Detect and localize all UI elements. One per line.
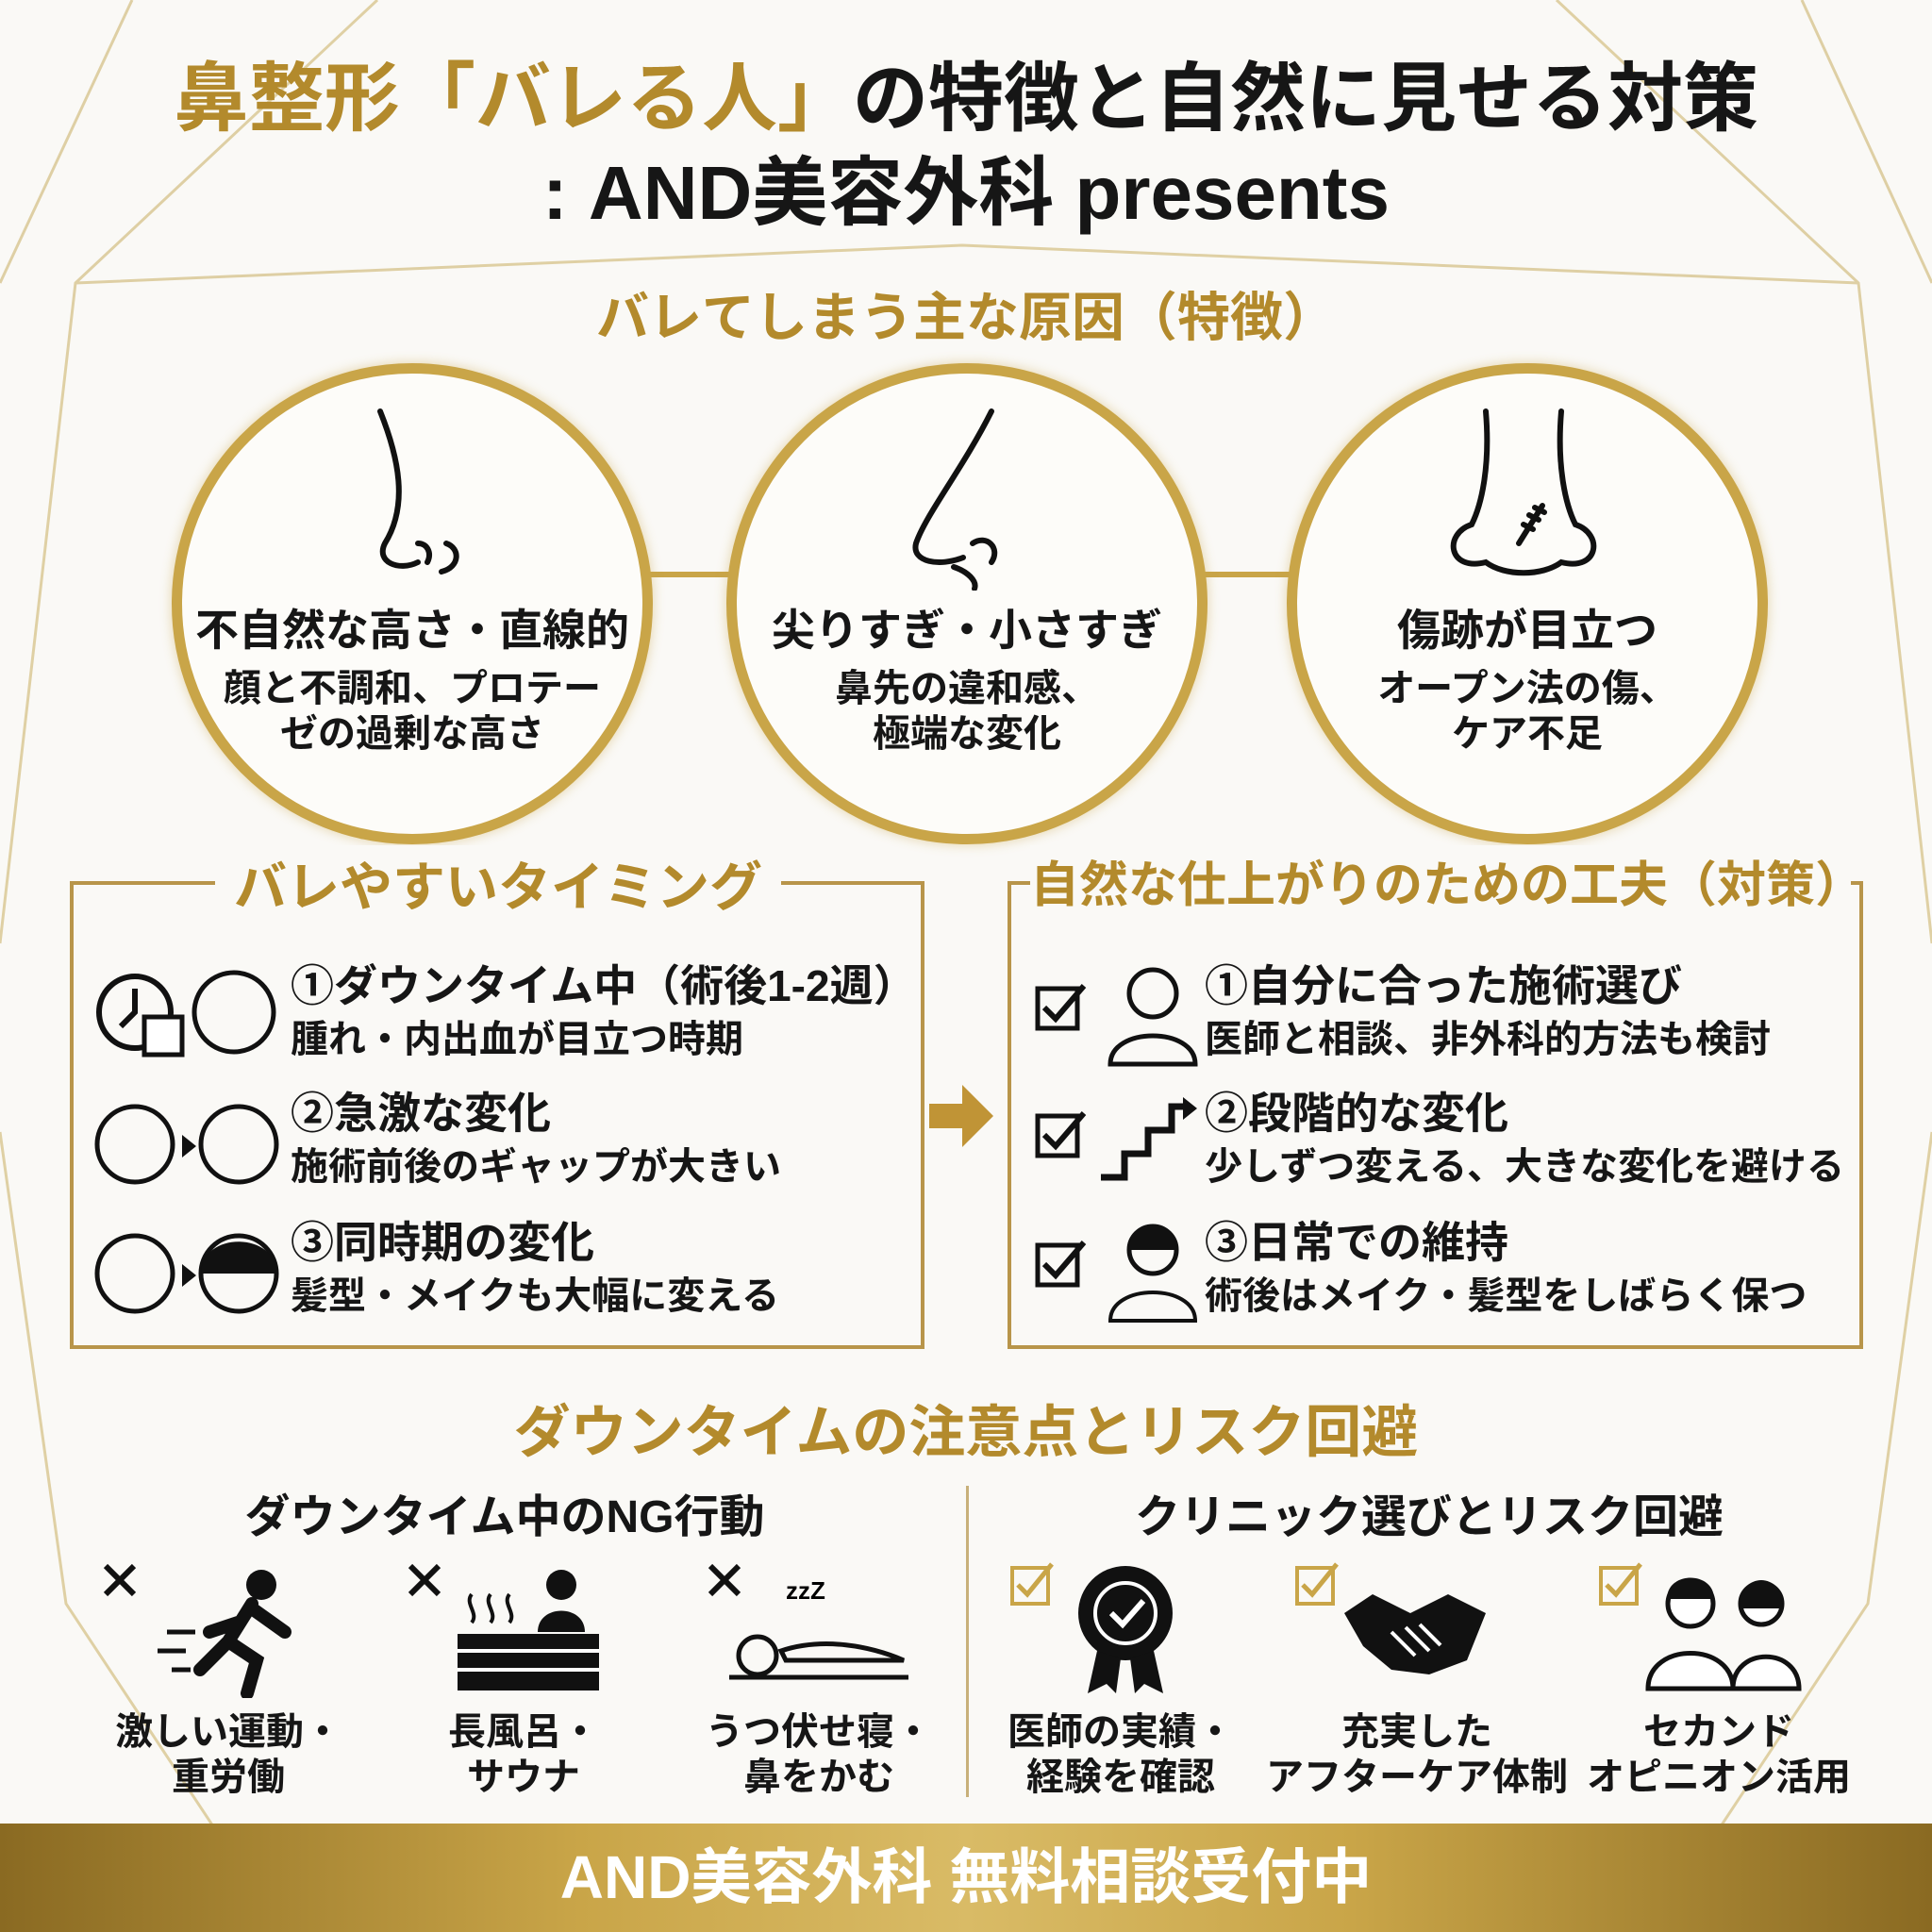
item 3: ③同時期の変化 (291, 1218, 594, 1267)
item 2: 少しずつ変える、大きな変化を避ける (1205, 1146, 1844, 1188)
heading: downtime: ダウンタイムの注意点とリスク回避 (514, 1401, 1418, 1464)
clinic: aftercare (1266, 1562, 1568, 1798)
icon: hairstyle change (94, 1234, 279, 1313)
clinic: experience (1008, 1562, 1234, 1798)
icon: check woman (1036, 1224, 1197, 1323)
icon: nose profile (377, 408, 459, 575)
item 3: 術後はメイク・髪型をしばらく保つ (1205, 1275, 1807, 1317)
subheading: clinic: クリニック選びとリスク回避 (1135, 1492, 1724, 1542)
title (174, 57, 1758, 235)
heading: timing: バレやすいタイミング (234, 858, 762, 917)
clinic: aftercare: アフターケア体制 (1266, 1757, 1568, 1798)
NG: sleep (706, 1564, 932, 1798)
clinic: second opinion (1587, 1562, 1851, 1798)
NG: sleep: うつ伏せ寝・ (706, 1711, 932, 1753)
item 1 (1036, 961, 1771, 1066)
NG: exercise: 激しい運動・ (115, 1711, 341, 1753)
NG: bath: 長風呂・ (448, 1711, 599, 1753)
panel: cause 2: 極端な変化 (873, 713, 1061, 755)
NG: exercise: 重労働 (172, 1757, 285, 1798)
item 1: 医師と相談、非外科的方法も検討 (1205, 1019, 1771, 1060)
panel: cause 1: 不自然な高さ・直線的 (195, 606, 629, 655)
panel: cause 3 (1287, 363, 1768, 844)
item 3 (94, 1218, 779, 1317)
footer banner (0, 1824, 1932, 1932)
item 2 (1036, 1089, 1844, 1188)
panel: cause 1 (172, 363, 653, 844)
clinic: second opinion: オピニオン活用 (1587, 1757, 1851, 1798)
NG: bath: サウナ (467, 1757, 580, 1798)
clinic: second opinion: セカンド (1643, 1711, 1794, 1753)
item 2: 施術前後のギャップが大きい (291, 1146, 781, 1188)
panel: measures (1008, 881, 1863, 1349)
title: 鼻整形「バレる人」の特徴と自然に見せる対策 (174, 57, 1758, 141)
icon: check steps (1036, 1097, 1197, 1181)
icon: clock and face (96, 970, 275, 1057)
icon: nose front with scar (1451, 408, 1596, 575)
item 2 (94, 1089, 781, 1188)
panel: cause 2 (726, 363, 1208, 844)
panel: cause 3: 傷跡が目立つ (1397, 606, 1657, 655)
item 1: ①ダウンタイム中（術後1-2週） (291, 961, 917, 1010)
NG: bath (408, 1564, 599, 1798)
connector lines (623, 572, 1321, 577)
item 1: ①自分に合った施術選び (1205, 961, 1682, 1010)
footer banner: AND美容外科 無料相談受付中 (560, 1843, 1372, 1911)
panel: cause 1: 顔と不調和、プロテー (224, 668, 601, 709)
NG: sleep: 鼻をかむ (743, 1757, 894, 1798)
panel: cause 3: オープン法の傷、 (1377, 668, 1677, 709)
panel: cause 1: ゼの過剰な高さ (280, 713, 544, 755)
NG: exercise (104, 1564, 341, 1798)
item 3: ③日常での維持 (1205, 1218, 1508, 1267)
item 2: ②段階的な変化 (1205, 1089, 1508, 1138)
panel: timing (70, 881, 924, 1349)
item 2: ②急激な変化 (291, 1089, 551, 1138)
item 3: 髪型・メイクも大幅に変える (291, 1275, 779, 1317)
item 3 (1036, 1218, 1807, 1323)
item 1: 腫れ・内出血が目立つ時期 (291, 1019, 743, 1060)
icon: pointed nose (912, 408, 998, 591)
clinic: experience: 経験を確認 (1026, 1757, 1215, 1798)
panel: cause 3: ケア不足 (1452, 713, 1603, 755)
clinic: experience: 医師の実績・ (1008, 1711, 1234, 1753)
title: : AND美容外科 presents (542, 151, 1390, 235)
heading: measures: 自然な仕上がりのための工夫（対策） (1030, 858, 1864, 913)
panel: cause 2: 鼻先の違和感、 (835, 668, 1099, 709)
arrow (929, 1085, 993, 1147)
NG: sleep: zzZ (786, 1576, 825, 1605)
item 1 (96, 961, 917, 1060)
panel: cause 2: 尖りすぎ・小さすぎ (772, 606, 1162, 655)
icon: check doctor (1036, 968, 1198, 1066)
heading: causes: バレてしまう主な原因（特徴） (596, 288, 1336, 347)
clinic: aftercare: 充実した (1341, 1711, 1492, 1753)
icon: before-after faces (94, 1104, 279, 1185)
subheading: NG actions: ダウンタイム中のNG行動 (244, 1492, 765, 1542)
